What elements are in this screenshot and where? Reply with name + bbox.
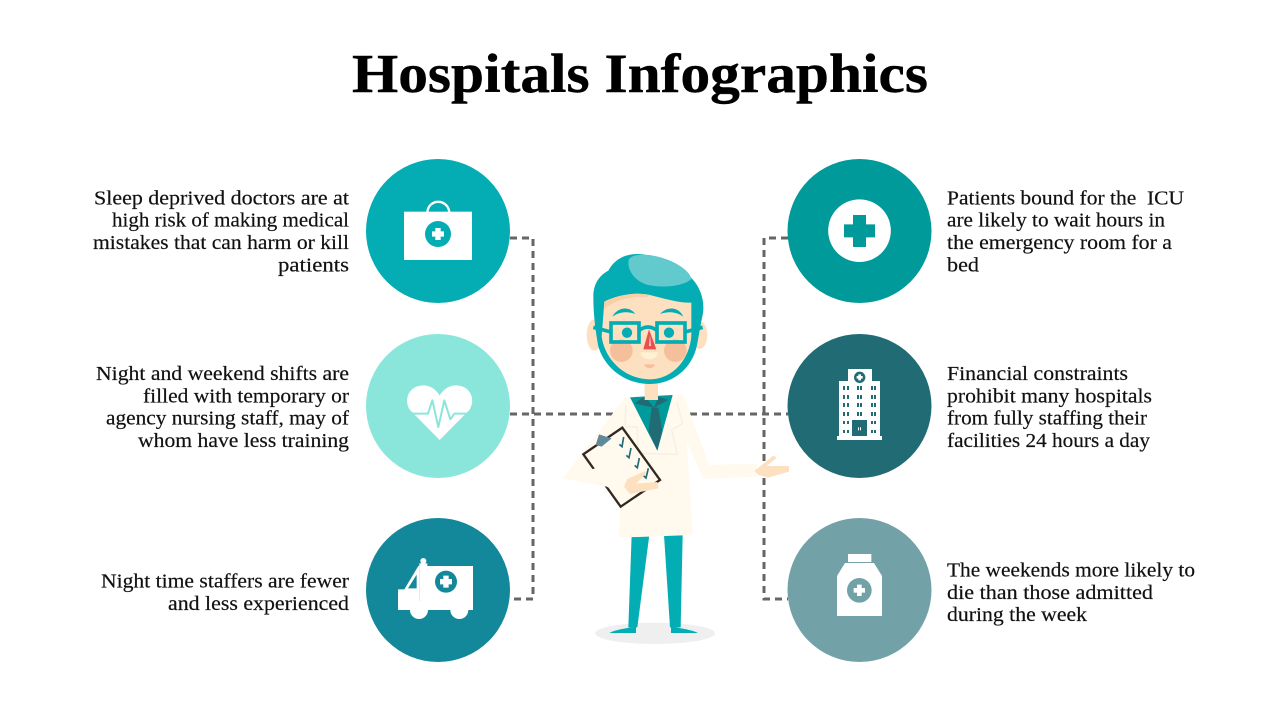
circle: medical cross [788, 159, 932, 303]
text: patients bound for ICU: are likely to wait hours in [947, 210, 1165, 232]
hair and outline [593, 254, 703, 384]
text: patients bound for ICU: Patients bound for the ICU [947, 187, 1184, 209]
chin [644, 364, 655, 368]
icon: cross in white circle [828, 199, 891, 262]
panel: hospital building [788, 334, 932, 478]
eyes [622, 327, 632, 338]
text: financial constraints: prohibit many hospitals [947, 385, 1152, 407]
text: weekends more likely: die than those admitted [947, 582, 1153, 604]
circle: ambulance [366, 518, 510, 662]
doctor head [587, 254, 707, 400]
text: financial constraints: Financial constraints [947, 363, 1128, 385]
text: night and weekend shifts: agency nursing staff, may of [106, 408, 349, 430]
left hand [624, 471, 658, 494]
text: patients bound for ICU: the emergency room for a [947, 232, 1172, 254]
text: night and weekend shifts: whom have less training [138, 430, 349, 452]
circle: medicine bottle [788, 518, 932, 662]
panel: medical kit [366, 159, 510, 303]
text: weekends more likely: The weekends more likely to [947, 560, 1195, 582]
circle: hospital building [788, 334, 932, 478]
text: night and weekend shifts: filled with temporary or [143, 385, 349, 407]
right hand [754, 456, 789, 478]
eyebrows [612, 309, 635, 317]
text: sleep deprived doctors: Sleep deprived doctors are at [94, 187, 349, 209]
text: financial constraints: facilities 24 hours a day [947, 430, 1151, 452]
text: night and weekend shifts: Night and weekend shifts are [96, 363, 349, 385]
icon: medicine bottle [837, 554, 882, 616]
lab coat [563, 395, 757, 538]
face [602, 294, 691, 379]
text: patients bound for ICU: bed [947, 254, 979, 276]
hair highlight [628, 255, 691, 287]
circle: heart [366, 334, 510, 478]
doctor body [563, 383, 789, 644]
text: financial constraints: from fully staffing their [947, 408, 1147, 430]
legs and shoes [609, 535, 698, 633]
nose [643, 329, 656, 349]
panel: heart [366, 334, 510, 478]
forehead shadow [604, 294, 650, 309]
circle: medical kit [366, 159, 510, 303]
panel: medicine bottle [788, 518, 932, 662]
text: sleep deprived doctors: mistakes that can harm or kill [93, 232, 349, 254]
text: weekends more likely: during the week [947, 604, 1088, 626]
icon: ambulance [398, 558, 473, 619]
text: night time staffers: Night time staffers are fewer [101, 570, 349, 592]
ground shadow [595, 623, 715, 644]
icon: medical kit [404, 202, 472, 260]
text: sleep deprived doctors [93, 187, 349, 276]
title: Hospitals Infographics [352, 43, 928, 104]
text: patients bound for ICU [947, 187, 1184, 276]
text: financial constraints [947, 363, 1152, 452]
shirt collar and tie [630, 395, 673, 451]
icon: hospital building [837, 369, 882, 440]
dashed connectors [510, 238, 788, 599]
sleeve over clipboard [563, 468, 610, 488]
panel: medical cross [788, 159, 932, 303]
text: night time staffers: and less experienced [168, 593, 349, 615]
ears [587, 319, 602, 351]
mouth [640, 352, 658, 359]
text: sleep deprived doctors: patients [278, 254, 349, 276]
neck [645, 383, 658, 400]
icon: heartbeat [407, 385, 472, 440]
text: night and weekend shifts [96, 363, 349, 452]
clipboard [583, 428, 660, 507]
text: weekends more likely [947, 560, 1195, 626]
illustration: doctor [563, 254, 789, 644]
neck [645, 382, 658, 400]
panel: ambulance [366, 518, 510, 662]
text: sleep deprived doctors: high risk of making medical [112, 210, 349, 232]
text: night time staffers [101, 570, 349, 615]
coat details [625, 402, 683, 454]
cheeks [610, 339, 633, 362]
glasses [593, 323, 703, 342]
